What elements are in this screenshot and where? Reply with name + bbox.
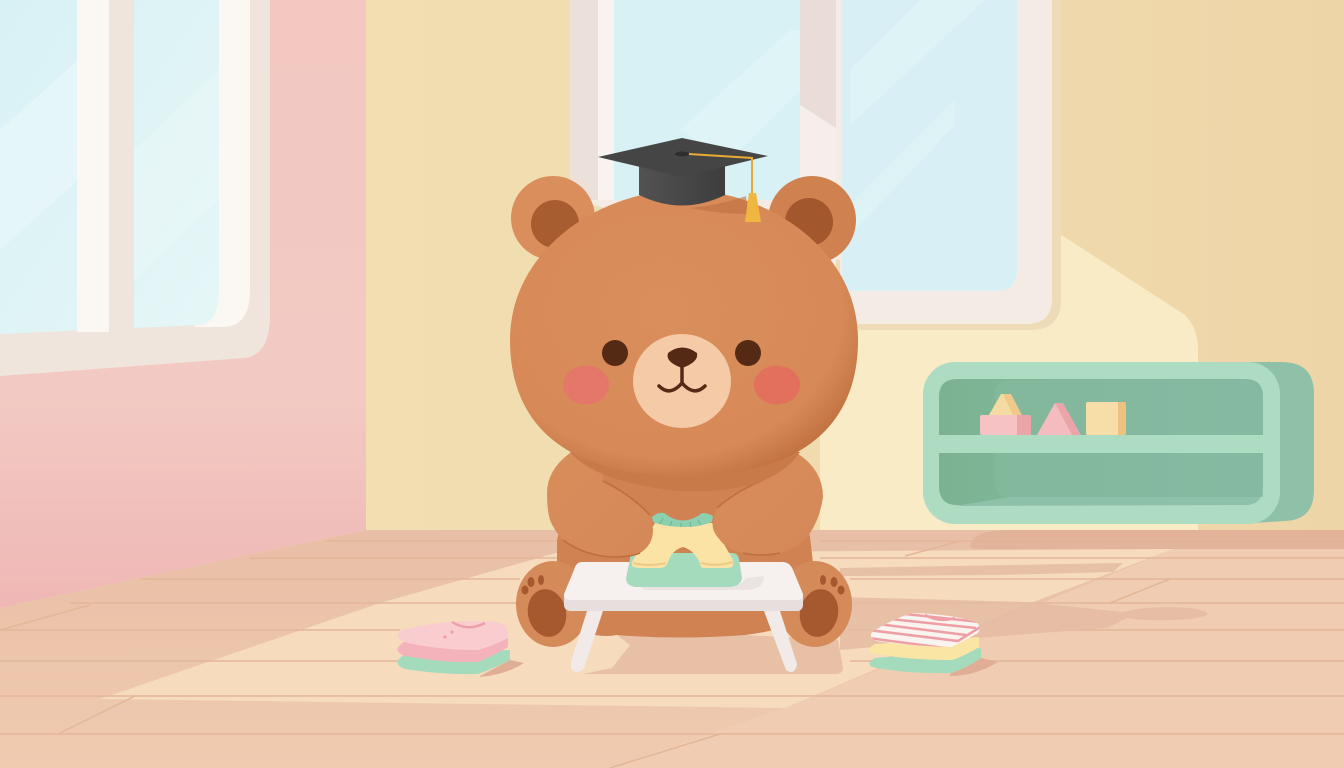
bear lower body <box>557 470 818 638</box>
shelf interior <box>939 379 1263 505</box>
back wall <box>366 0 1344 535</box>
yellow garment <box>632 513 733 568</box>
tassel <box>689 154 761 222</box>
right foot <box>778 561 852 647</box>
toy: triangle on block <box>980 394 1031 435</box>
right stack of clothes <box>868 613 998 676</box>
sunlight patch on wall <box>820 200 1198 530</box>
toy: yellow cube <box>1086 402 1126 435</box>
green shelf <box>923 362 1314 524</box>
shadow of bear and table on floor <box>583 563 1208 674</box>
left stack of clothes <box>398 621 524 677</box>
shelf board <box>939 435 1263 453</box>
arm creases <box>563 480 780 557</box>
head shadow on chest <box>570 452 800 492</box>
right arm <box>713 453 823 555</box>
eyes <box>602 340 761 366</box>
shelf side panel <box>1240 362 1314 524</box>
ears <box>511 176 856 264</box>
shelf frame <box>923 362 1280 524</box>
white table <box>564 562 803 672</box>
toy: pink triangle <box>1037 403 1081 435</box>
left window <box>0 0 270 376</box>
bear arms <box>547 452 823 557</box>
shadow of shelf on floor <box>970 530 1344 549</box>
left foot <box>516 561 590 647</box>
center window <box>570 0 1061 330</box>
nose and mouth <box>659 348 705 391</box>
graduation cap <box>598 138 768 222</box>
collar <box>652 513 713 527</box>
wooden floor <box>0 530 1344 768</box>
left arm <box>547 453 653 557</box>
cheeks <box>563 366 800 404</box>
green folded clothes on table <box>626 553 742 587</box>
head <box>510 190 858 476</box>
bear head <box>510 176 858 476</box>
muzzle <box>633 334 731 428</box>
bear body and feet <box>516 470 852 647</box>
pink side wall <box>0 0 366 608</box>
